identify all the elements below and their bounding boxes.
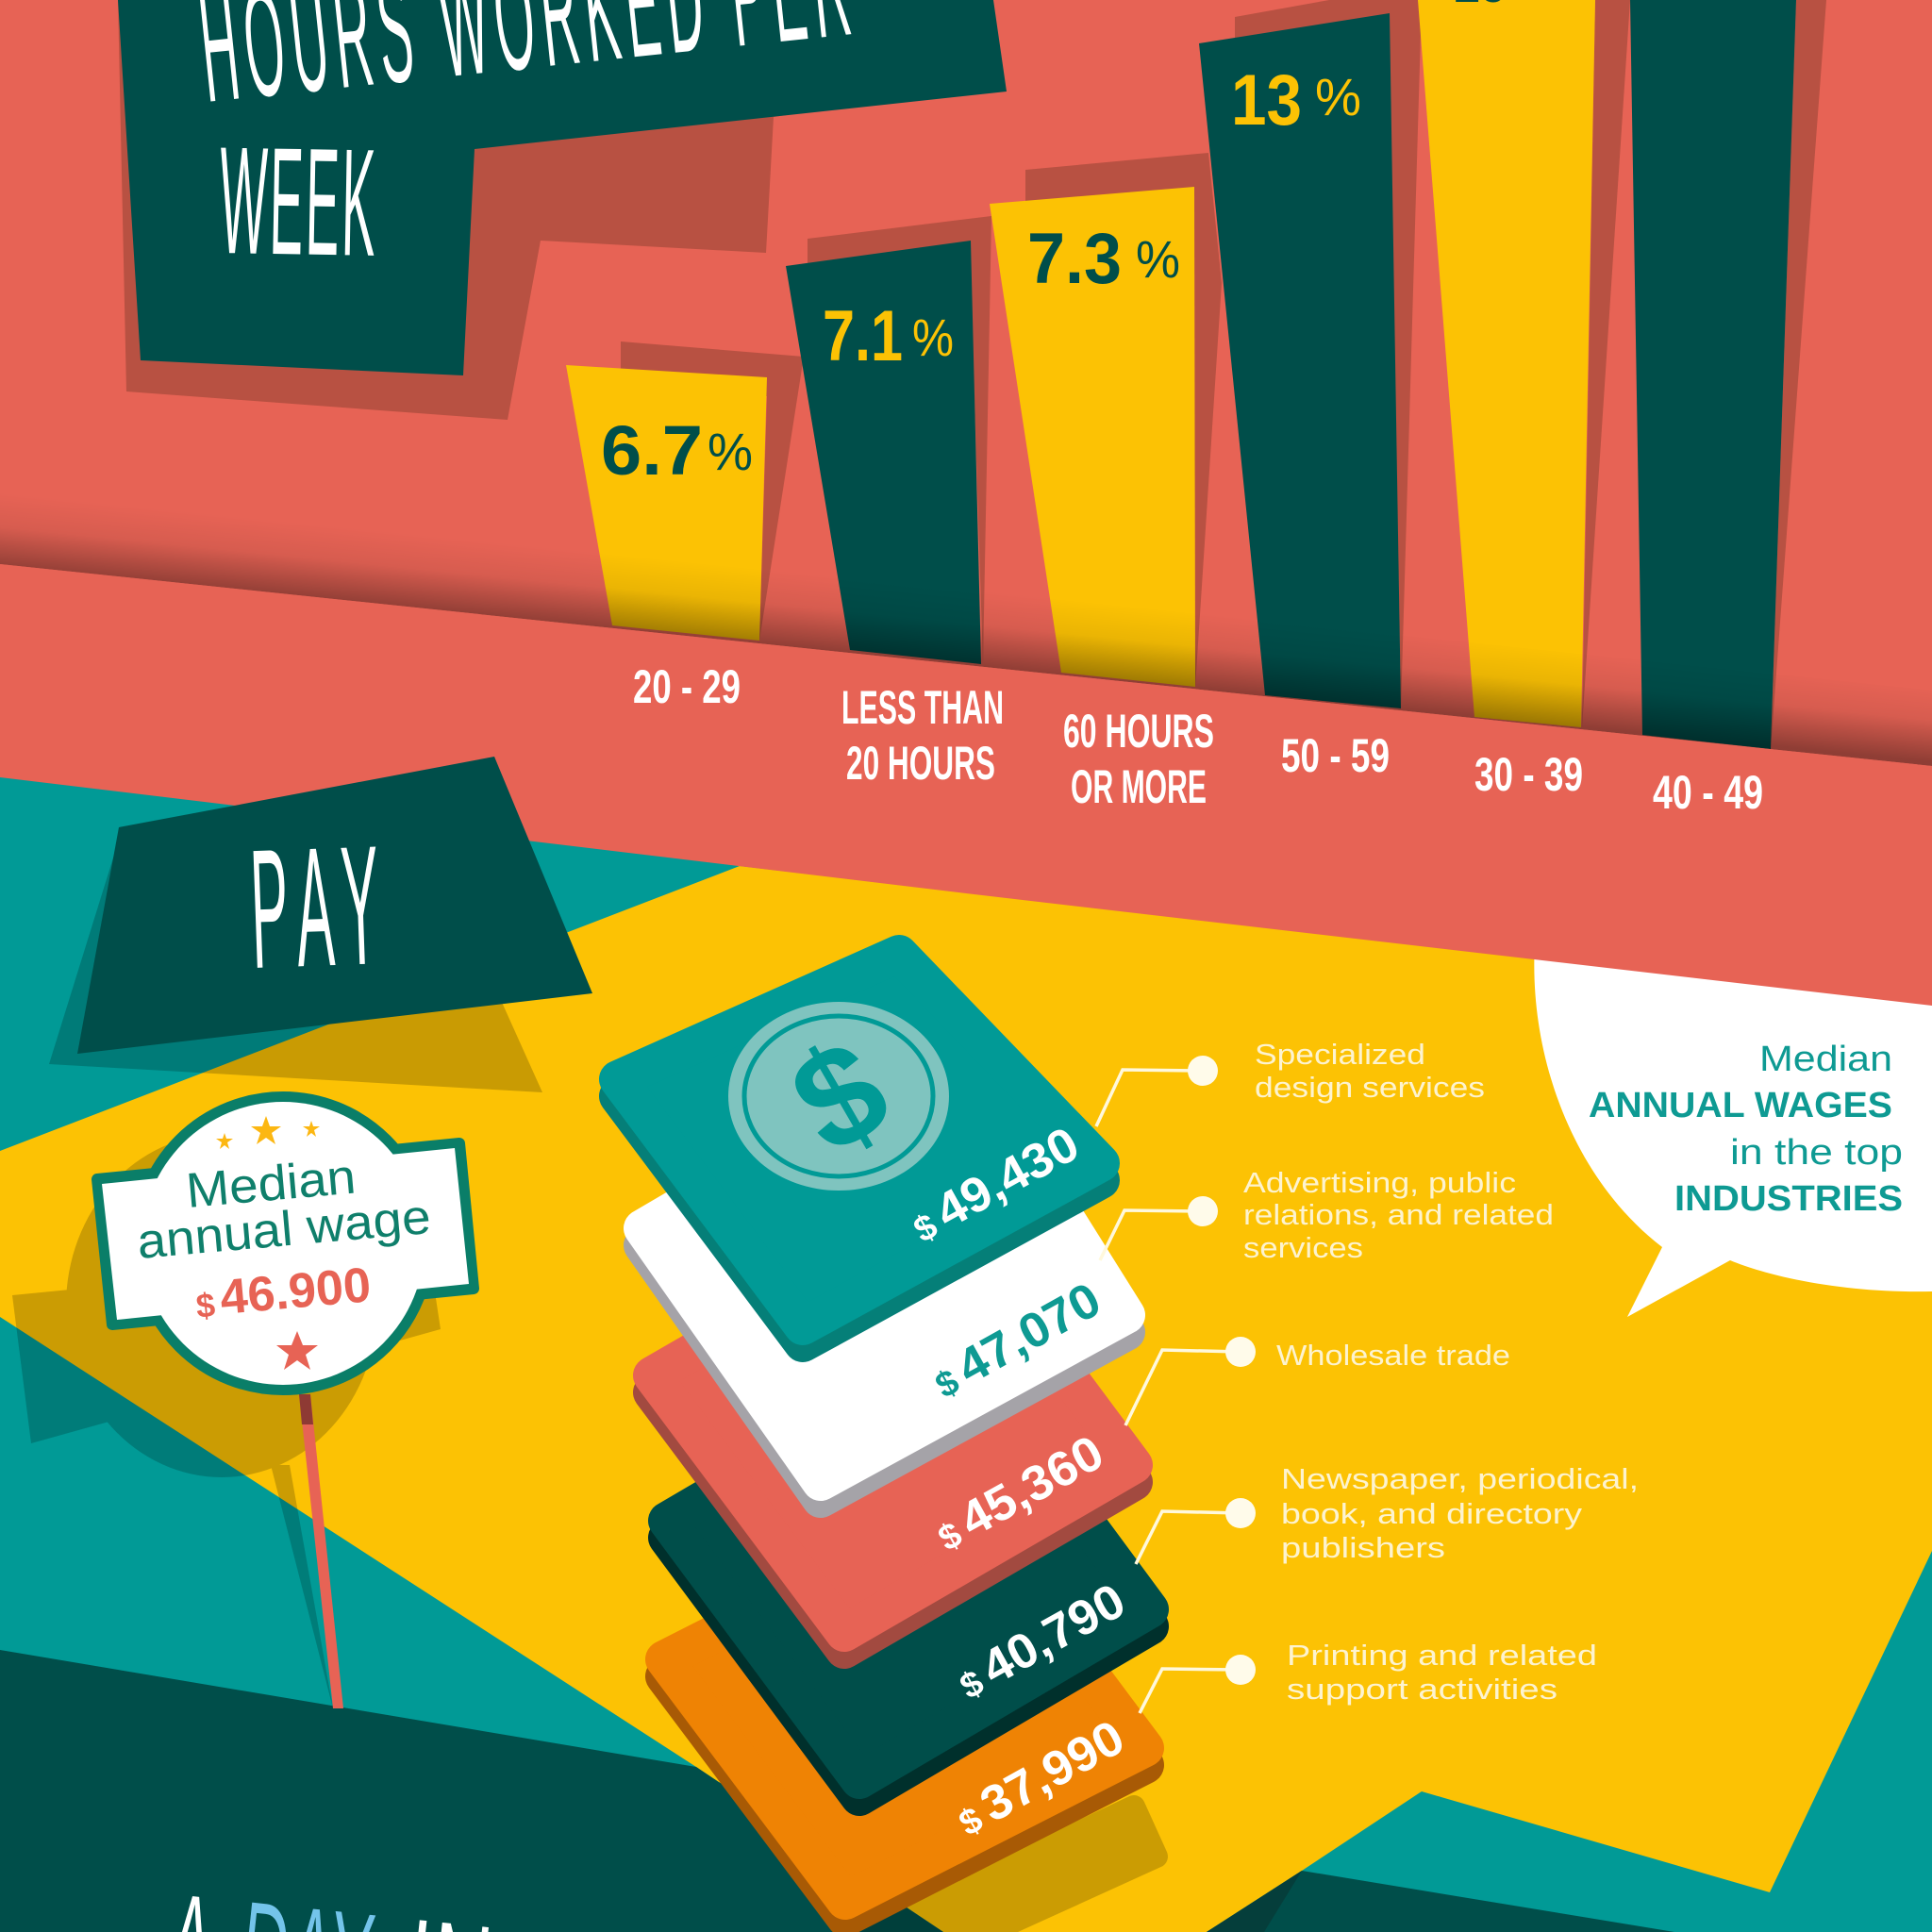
sign text: annual wage bbox=[135, 1190, 433, 1270]
bar shadows bbox=[621, 0, 1826, 749]
tile value: $ bbox=[932, 1515, 969, 1559]
tile: wholesale 45,360 bbox=[652, 1208, 1134, 1650]
sign text bbox=[135, 1149, 433, 1270]
bar: 60 hours or more bbox=[990, 187, 1195, 687]
title banner bbox=[118, 0, 1007, 375]
value: 6.7 percent bbox=[601, 411, 753, 490]
tile value: $ bbox=[929, 1362, 966, 1407]
value: 13 percent: 13 bbox=[1231, 60, 1302, 141]
industry labels: Advertising, public bbox=[1243, 1166, 1516, 1199]
yellow pay panel bbox=[0, 866, 1932, 1932]
leader line: specialized design services bbox=[1096, 1056, 1218, 1126]
bubble text bbox=[1589, 1040, 1903, 1219]
icon: dollar coin: $ bbox=[766, 1008, 913, 1184]
tile value: $ bbox=[908, 1207, 944, 1251]
industry labels: design services bbox=[1255, 1071, 1485, 1104]
sign stars bbox=[216, 1116, 320, 1149]
value: 13 percent bbox=[1231, 60, 1361, 141]
tile: advertising 47,070 bbox=[642, 1044, 1126, 1499]
bar: less than 20 hours bbox=[786, 241, 981, 664]
sign shadow bbox=[12, 1134, 441, 1708]
industry labels: services bbox=[1243, 1231, 1363, 1264]
tile value: 49,430 bbox=[926, 1117, 1088, 1240]
value: 13 percent: % bbox=[1315, 67, 1361, 126]
value: 6.7 percent: 6.7 bbox=[601, 411, 703, 490]
bottom heading clipped at page edge bbox=[158, 1861, 499, 1932]
value: 7.3 percent: 7.3 bbox=[1027, 219, 1122, 299]
title text bbox=[192, 0, 858, 289]
dark footer panel: right bbox=[1207, 1871, 1674, 1932]
bar labels: 60 HOURS bbox=[1063, 705, 1214, 758]
bar labels: OR MORE bbox=[1071, 760, 1207, 813]
bubble text: Median bbox=[1759, 1040, 1892, 1079]
sign value: $ bbox=[194, 1285, 217, 1325]
bar: 20 - 29 bbox=[566, 365, 767, 641]
bar: 40 - 49 bbox=[1630, 0, 1796, 749]
tile value: 37,990 bbox=[972, 1710, 1133, 1833]
bar: 30 - 39 bbox=[1418, 0, 1595, 727]
industry labels: Wholesale trade bbox=[1276, 1339, 1510, 1372]
sign value: 46.900 bbox=[218, 1257, 373, 1325]
leader line: newspaper publishers bbox=[1136, 1498, 1256, 1564]
sign star bbox=[276, 1331, 318, 1370]
leader line: printing bbox=[1140, 1655, 1256, 1713]
speech bubble bbox=[1534, 943, 1932, 1317]
pay heading: PAY bbox=[247, 811, 382, 1005]
title banner shadow bbox=[118, 0, 993, 420]
value: 7.1 percent: % bbox=[912, 308, 954, 367]
bar labels: 50 - 59 bbox=[1281, 729, 1390, 782]
coral band with bar labels bbox=[0, 564, 1932, 1006]
bar: 50 - 59 bbox=[1199, 13, 1401, 708]
value: 7.3 percent bbox=[1027, 219, 1180, 299]
tile value: 45,360 bbox=[951, 1425, 1112, 1548]
pay banner shadow bbox=[49, 840, 542, 1092]
sign text: Median bbox=[184, 1149, 358, 1219]
bar labels bbox=[633, 660, 1763, 819]
industry labels: Printing and related bbox=[1287, 1639, 1597, 1672]
value: 6.7 percent: % bbox=[708, 422, 753, 481]
title text: WEEK bbox=[218, 115, 377, 289]
industry labels: book, and directory bbox=[1281, 1497, 1583, 1530]
dark footer panel: left bbox=[0, 1650, 943, 1932]
bar labels: 20 HOURS bbox=[846, 737, 995, 790]
value: 7.3 percent: % bbox=[1136, 229, 1180, 289]
bar labels: 30 - 39 bbox=[1474, 748, 1583, 801]
sign board bbox=[97, 1097, 474, 1390]
bubble text: INDUSTRIES bbox=[1674, 1179, 1903, 1219]
tile: design services 49,430 bbox=[618, 954, 1101, 1343]
tile value: 47,070 bbox=[948, 1273, 1109, 1395]
tile value: $ bbox=[954, 1663, 991, 1707]
icon: dollar coin bbox=[728, 1002, 949, 1191]
industry labels: relations, and related bbox=[1243, 1198, 1554, 1231]
sign bbox=[97, 1097, 474, 1708]
industry labels: Specialized bbox=[1255, 1038, 1425, 1071]
tile: printing 37,990 bbox=[664, 1507, 1145, 1918]
value: 7.1 percent: 7.1 bbox=[823, 296, 903, 376]
bubble text: in the top bbox=[1730, 1133, 1903, 1173]
bar labels: 20 - 29 bbox=[633, 660, 741, 713]
pay banner bbox=[77, 757, 592, 1054]
industry labels bbox=[1243, 1038, 1639, 1706]
bar labels: 40 - 49 bbox=[1653, 766, 1763, 819]
sign pole bbox=[299, 1394, 343, 1708]
bar chart: hours worked per week bbox=[566, 0, 1826, 749]
tile: publishers 40,790 bbox=[667, 1350, 1150, 1797]
teal background bbox=[0, 769, 1932, 1932]
leader line: advertising bbox=[1100, 1196, 1218, 1260]
bubble text: ANNUAL WAGES bbox=[1589, 1086, 1892, 1125]
industry labels: support activities bbox=[1287, 1673, 1557, 1706]
industry labels: Newspaper, periodical, bbox=[1281, 1462, 1639, 1495]
bar labels: LESS THAN bbox=[841, 681, 1004, 734]
industry labels: publishers bbox=[1281, 1531, 1445, 1564]
tile shadow bbox=[868, 1807, 1157, 1932]
leader line: wholesale trade bbox=[1125, 1337, 1256, 1425]
tile value: 40,790 bbox=[973, 1574, 1134, 1696]
tile value: $ bbox=[953, 1800, 990, 1844]
